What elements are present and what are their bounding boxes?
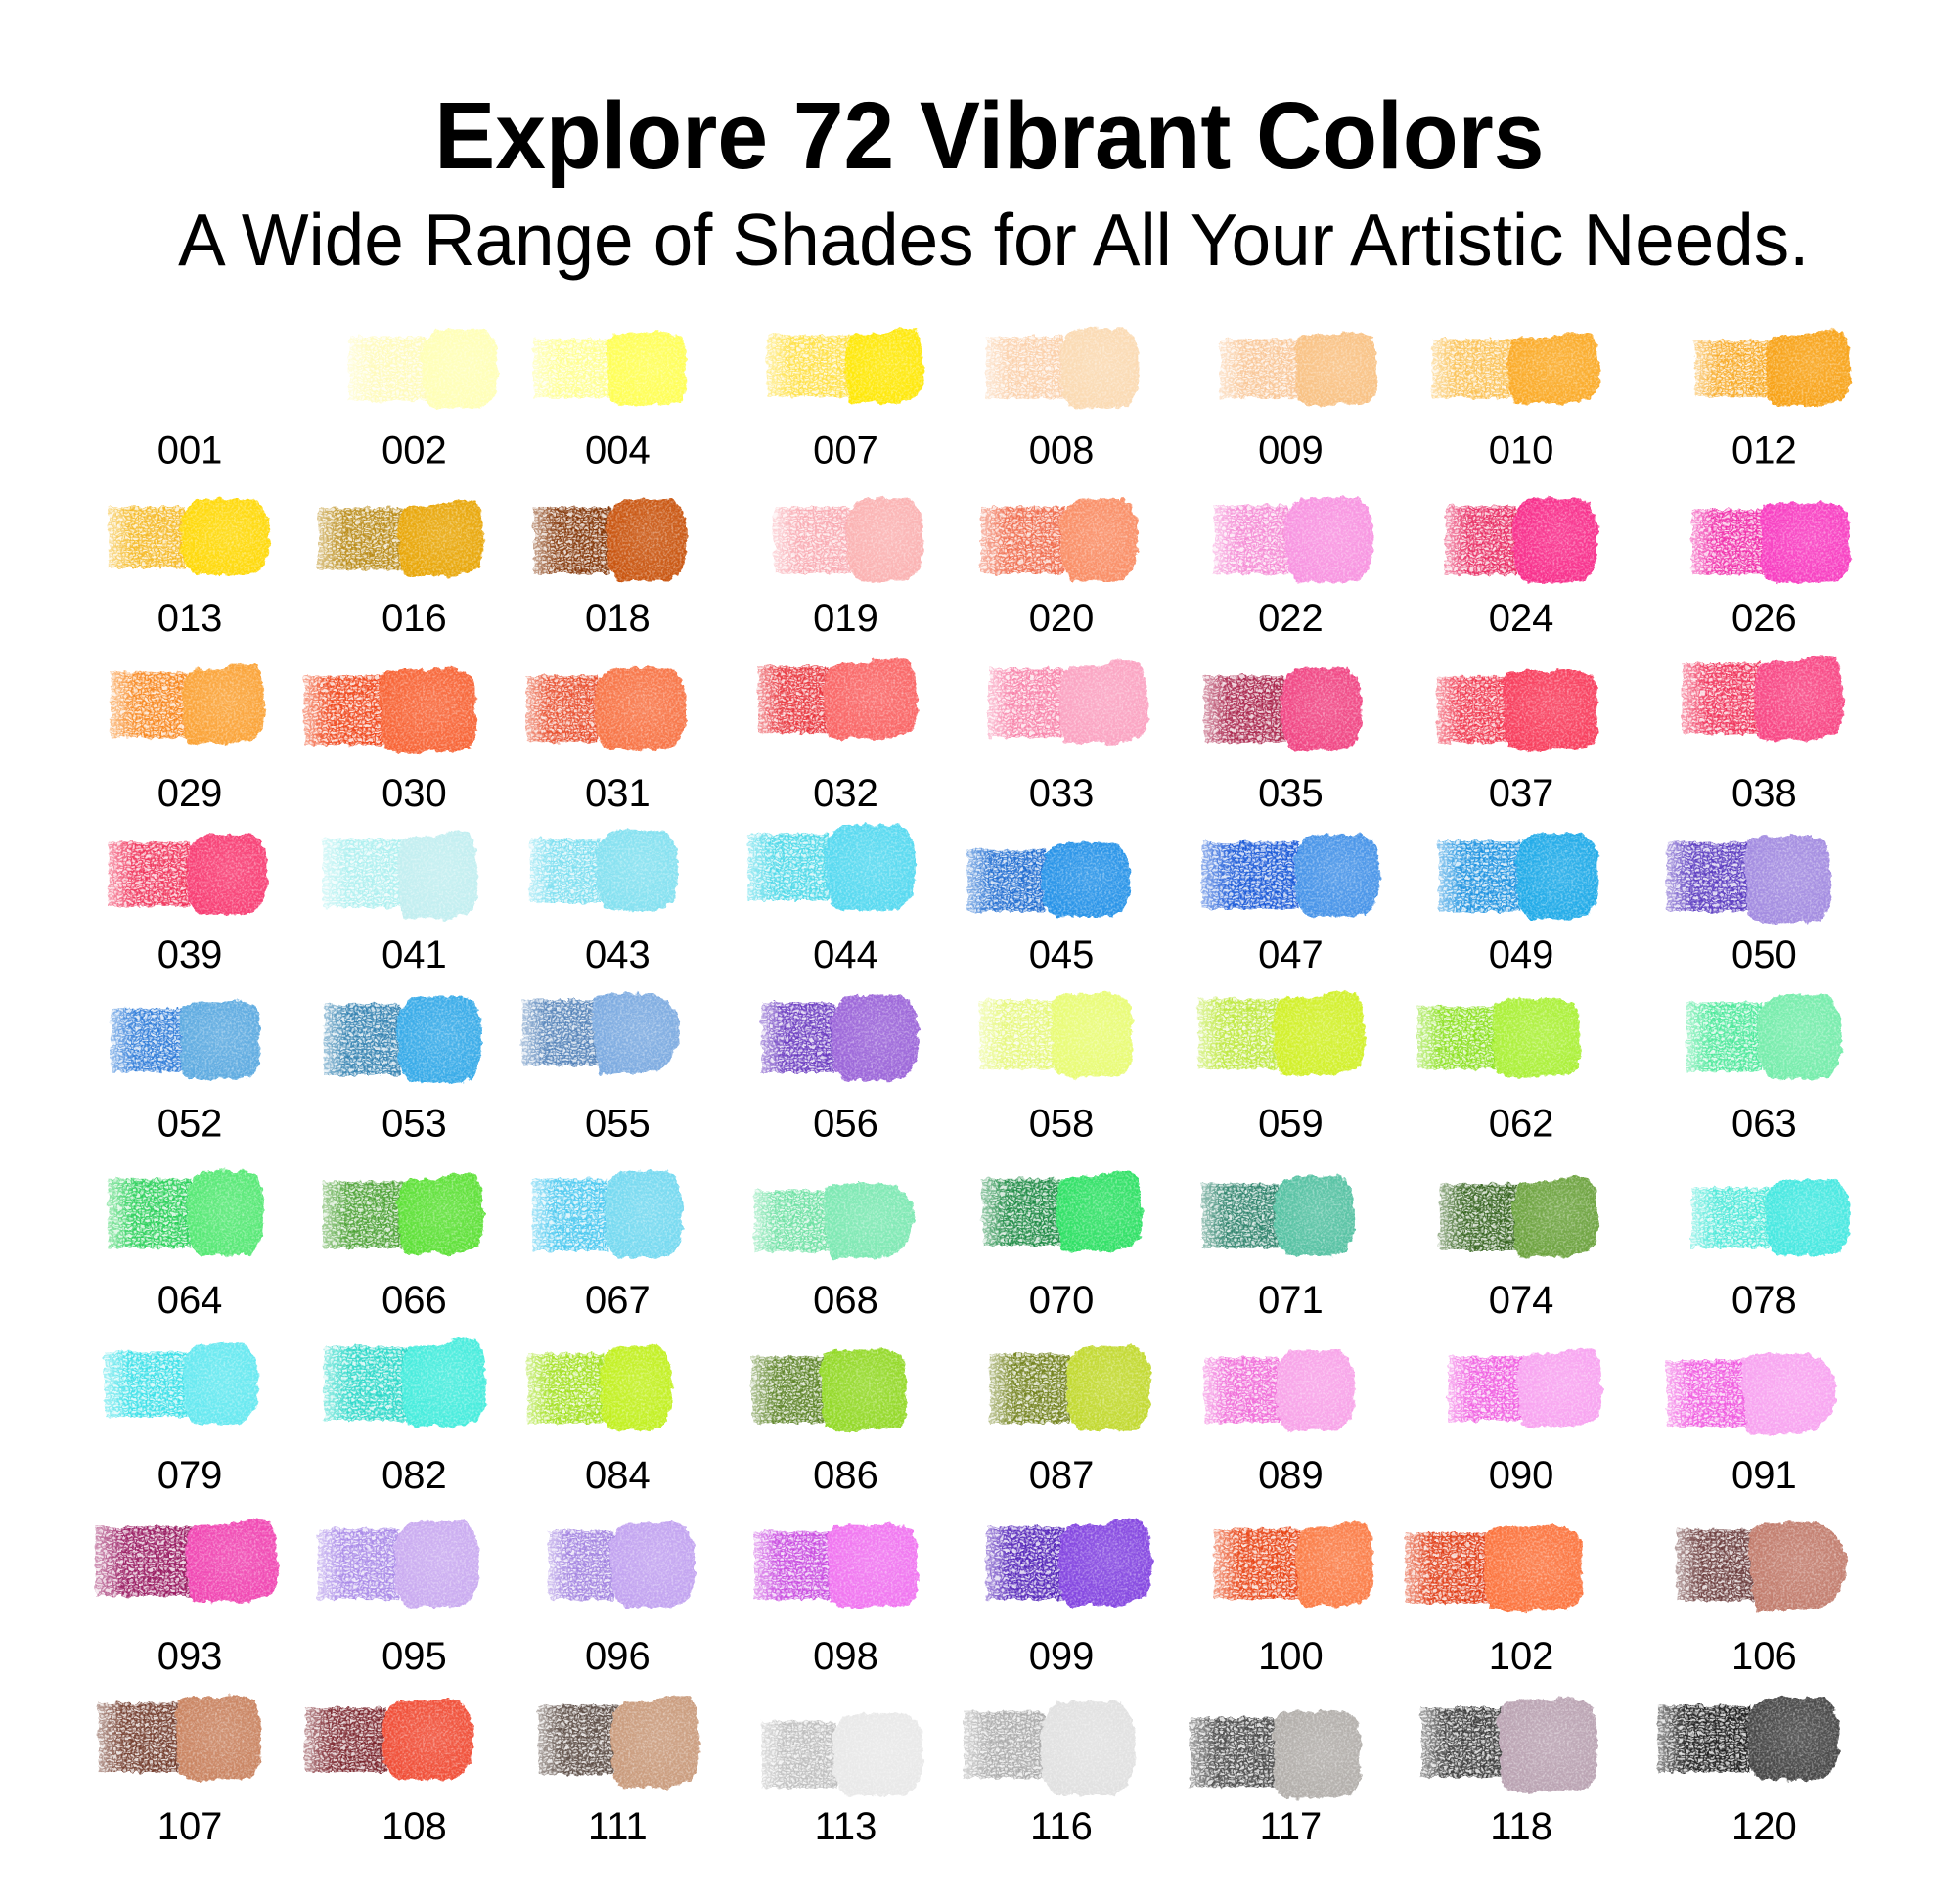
swatch 038: 038 (1731, 772, 1797, 815)
swatch 091: 091 (1731, 1454, 1797, 1497)
swatch 090 (1449, 1348, 1602, 1497)
swatch 024: 024 (1489, 597, 1553, 640)
swatch 056: 056 (813, 1103, 878, 1146)
swatch 086 (752, 1348, 907, 1497)
swatch 050: 050 (1731, 933, 1797, 976)
swatch 064 (109, 1171, 264, 1322)
swatch 090: 090 (1489, 1454, 1553, 1497)
swatch 078 (1691, 1179, 1850, 1322)
swatch 106 (1677, 1522, 1847, 1678)
swatch 007: 007 (813, 429, 878, 472)
swatch 035 (1204, 667, 1362, 815)
swatch 004: 004 (585, 429, 651, 472)
swatch 008 (986, 329, 1139, 472)
swatch 031 (526, 667, 687, 815)
swatch 116: 116 (1030, 1805, 1093, 1848)
swatch 044: 044 (813, 933, 878, 976)
swatch 098: 098 (813, 1635, 878, 1678)
swatch 050 (1667, 835, 1830, 976)
swatch 030: 030 (382, 772, 447, 815)
swatch 031: 031 (585, 772, 651, 815)
swatch 035: 035 (1258, 772, 1324, 815)
swatch 053: 053 (382, 1103, 447, 1146)
swatch 019: 019 (813, 597, 878, 640)
swatch 068: 068 (813, 1279, 878, 1322)
swatch 002 (349, 329, 498, 472)
swatch 117: 117 (1260, 1805, 1322, 1848)
swatch 032 (758, 658, 919, 815)
swatch 039: 039 (157, 933, 222, 976)
swatch 018: 018 (585, 597, 651, 640)
swatch 098 (754, 1523, 919, 1678)
swatch 039 (109, 834, 267, 976)
swatch 118: 118 (1490, 1805, 1552, 1848)
swatch 053 (324, 996, 482, 1146)
swatch 096: 096 (585, 1635, 651, 1678)
swatch 038 (1683, 656, 1844, 815)
swatch 082: 082 (382, 1454, 447, 1497)
swatch 052: 052 (157, 1103, 222, 1146)
swatch 063 (1686, 994, 1842, 1146)
swatch 002: 002 (382, 429, 447, 472)
swatch 100 (1214, 1521, 1374, 1678)
swatch 033 (989, 660, 1149, 815)
swatch 120: 120 (1731, 1805, 1797, 1848)
swatch 106: 106 (1731, 1635, 1797, 1678)
swatch 058: 058 (1029, 1103, 1094, 1146)
swatch 087 (990, 1346, 1151, 1497)
swatch 095 (318, 1521, 479, 1678)
swatch 082 (324, 1338, 487, 1497)
swatch 067 (532, 1171, 683, 1322)
swatch 047: 047 (1258, 933, 1324, 976)
swatch 009 (1221, 333, 1376, 472)
swatch 074 (1440, 1176, 1598, 1322)
swatch 079 (105, 1343, 257, 1497)
swatch 095: 095 (382, 1635, 447, 1678)
swatch 067: 067 (585, 1279, 651, 1322)
swatch 062 (1417, 998, 1580, 1146)
swatch 012 (1695, 330, 1852, 472)
swatch 063: 063 (1731, 1103, 1797, 1146)
swatch 026: 026 (1731, 597, 1797, 640)
swatch 089 (1204, 1349, 1355, 1497)
swatch 113 (762, 1713, 923, 1848)
swatch 013: 013 (157, 597, 222, 640)
swatch 045: 045 (1029, 933, 1094, 976)
subtitle: A Wide Range of Shades for All Your Artistic Needs. (178, 199, 1809, 281)
swatch 102: 102 (1489, 1635, 1553, 1678)
swatch 047 (1202, 834, 1379, 976)
swatch 071 (1202, 1176, 1355, 1322)
swatch 089: 089 (1258, 1454, 1324, 1497)
title: Explore 72 Vibrant Colors (434, 82, 1544, 189)
swatch 026 (1691, 502, 1850, 640)
swatch 055: 055 (585, 1103, 651, 1146)
swatch 004 (534, 331, 687, 472)
swatch 019 (774, 499, 923, 640)
swatch 056 (762, 994, 919, 1146)
swatch 108: 108 (382, 1805, 447, 1848)
swatch 037: 037 (1489, 772, 1553, 815)
swatch 018 (534, 499, 687, 640)
swatch 045 (967, 842, 1130, 976)
swatch 093 (96, 1519, 279, 1678)
swatch 010: 010 (1489, 429, 1553, 472)
swatch 016: 016 (382, 597, 447, 640)
swatch 008: 008 (1029, 429, 1094, 472)
swatch 049: 049 (1489, 933, 1553, 976)
swatch 062: 062 (1489, 1103, 1553, 1146)
swatch 111: 111 (588, 1805, 648, 1848)
swatch 044 (748, 824, 916, 976)
swatch 059: 059 (1258, 1103, 1324, 1146)
swatch 100: 100 (1258, 1635, 1324, 1678)
swatch 093: 093 (157, 1635, 222, 1678)
swatch 099: 099 (1029, 1635, 1094, 1678)
swatch 086: 086 (813, 1454, 878, 1497)
swatch 020: 020 (1029, 597, 1094, 640)
swatch 079: 079 (157, 1454, 222, 1497)
swatch 117 (1190, 1710, 1361, 1848)
swatch 108 (306, 1700, 473, 1848)
swatch 091 (1667, 1353, 1837, 1497)
swatch 043: 043 (585, 933, 651, 976)
swatch 071: 071 (1258, 1279, 1324, 1322)
swatch 059 (1198, 991, 1366, 1146)
swatch 070: 070 (1029, 1279, 1094, 1322)
swatch 111 (539, 1696, 700, 1848)
swatch 022 (1214, 497, 1373, 640)
swatch 078: 078 (1731, 1279, 1797, 1322)
swatch 030 (304, 668, 476, 815)
swatch 041 (323, 831, 478, 976)
swatch 116 (964, 1701, 1135, 1848)
swatch 032: 032 (813, 772, 878, 815)
swatch 064: 064 (157, 1279, 222, 1322)
swatch 066: 066 (382, 1279, 447, 1322)
swatch 049 (1439, 833, 1598, 976)
swatch 010 (1432, 333, 1600, 472)
swatch 084: 084 (585, 1454, 651, 1497)
swatch 029 (111, 664, 265, 815)
swatch 118 (1421, 1698, 1597, 1848)
swatch 096 (549, 1522, 696, 1678)
swatch 066 (323, 1173, 484, 1322)
swatch 037 (1437, 669, 1598, 815)
swatch 033: 033 (1029, 772, 1094, 815)
swatch 107: 107 (157, 1805, 222, 1848)
swatch 001: 001 (157, 429, 222, 472)
swatch 052 (111, 1001, 260, 1146)
swatch 068 (754, 1183, 915, 1322)
swatch 084 (527, 1346, 672, 1497)
swatch 024 (1446, 497, 1597, 640)
swatch 102 (1406, 1525, 1583, 1678)
swatch 016 (318, 500, 484, 640)
swatch 012: 012 (1731, 429, 1797, 472)
swatch 070 (982, 1171, 1143, 1322)
swatch 074: 074 (1489, 1279, 1553, 1322)
swatch 043 (530, 831, 678, 976)
swatch 058 (980, 992, 1133, 1146)
swatch 007 (767, 329, 924, 472)
swatch 041: 041 (382, 933, 447, 976)
swatch 087: 087 (1029, 1454, 1094, 1497)
swatch 107 (99, 1696, 261, 1848)
swatch grid (96, 329, 1852, 1848)
swatch 055 (522, 993, 681, 1146)
swatch 020 (981, 499, 1138, 640)
swatch 029: 029 (157, 772, 222, 815)
swatch 013 (109, 499, 270, 640)
swatch 099 (986, 1519, 1152, 1678)
swatch 009: 009 (1258, 429, 1324, 472)
swatch 120 (1658, 1698, 1839, 1848)
swatch 022: 022 (1258, 597, 1324, 640)
swatch 113: 113 (815, 1805, 877, 1848)
